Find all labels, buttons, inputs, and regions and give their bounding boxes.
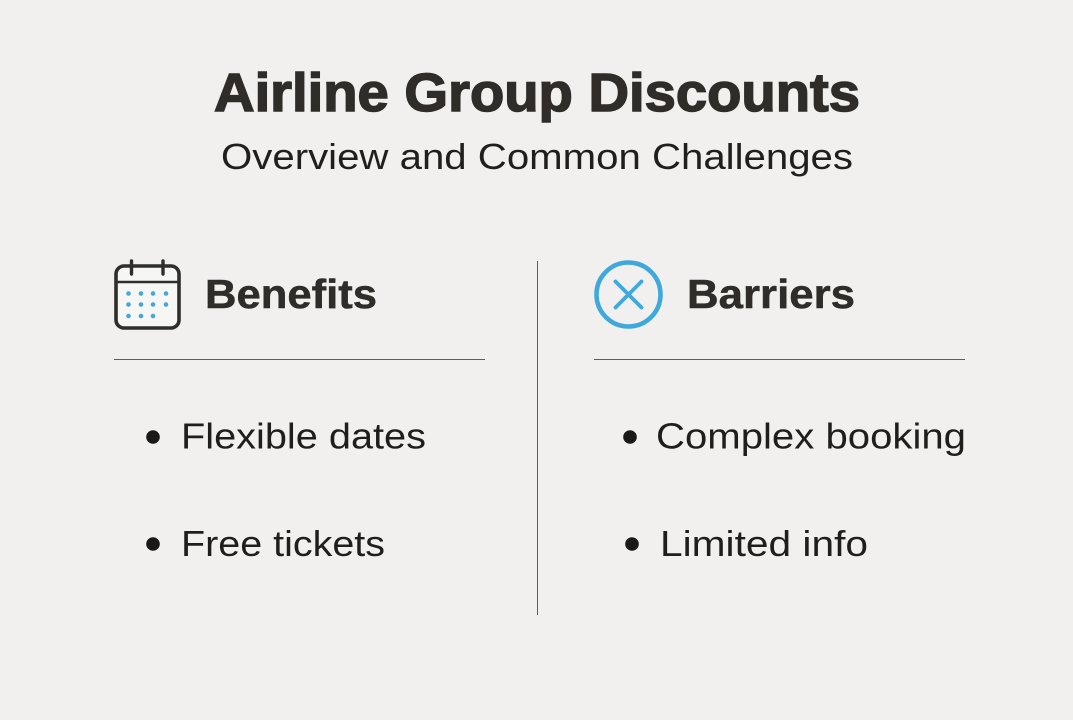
bullet item: limited info: Limited info (660, 523, 868, 564)
icon: x in circle (596, 262, 660, 326)
bullet item: flexible dates: Flexible dates (181, 416, 426, 456)
bullet item: complex booking: Complex booking (656, 416, 966, 456)
benefits rule (114, 358, 485, 360)
center divider (536, 261, 538, 615)
panel: barriers (594, 262, 966, 564)
title: Airline Group Discounts (214, 63, 860, 123)
icon: calendar (116, 261, 179, 328)
subtitle: Overview and Common Challenges (221, 136, 853, 177)
barriers rule (594, 358, 965, 360)
heading: benefits: Benefits (205, 271, 377, 317)
heading: barriers: Barriers (687, 271, 855, 317)
bullet item: free tickets: Free tickets (181, 523, 385, 564)
panel: benefits (114, 261, 485, 564)
